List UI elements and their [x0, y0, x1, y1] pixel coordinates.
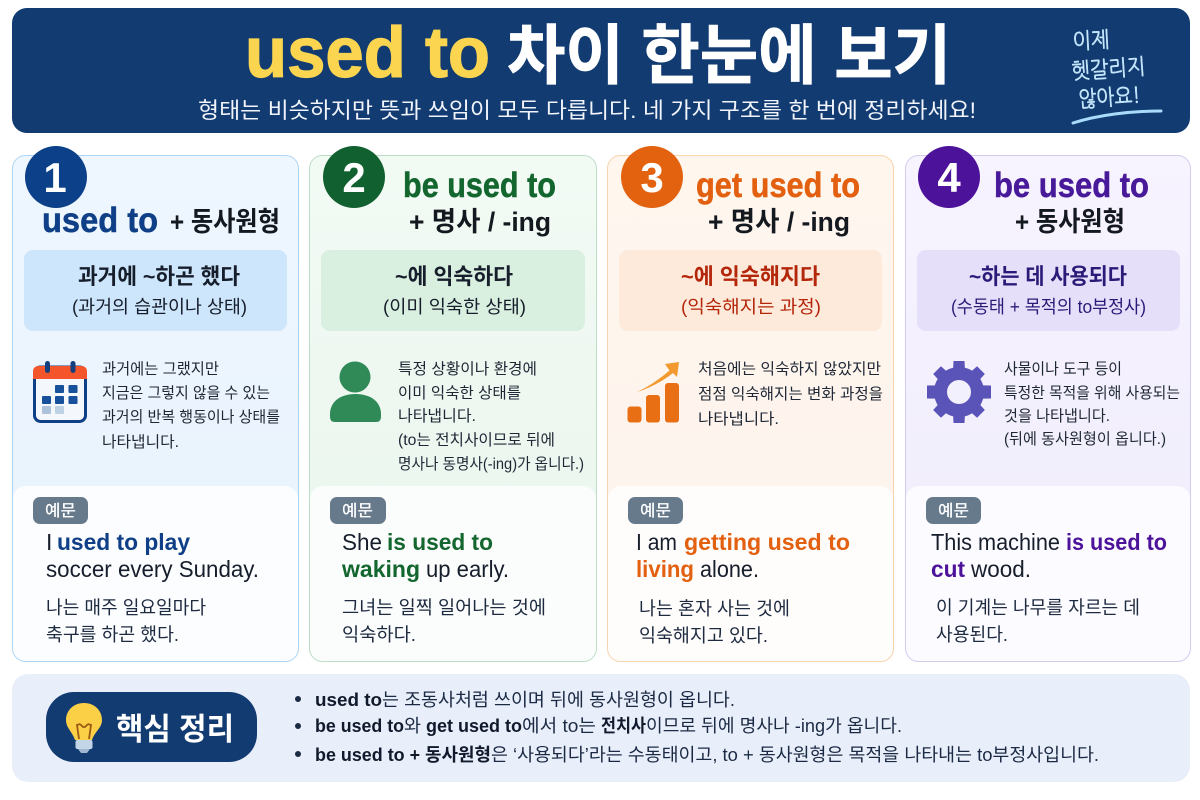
description: 이미 익숙한 상태를 [398, 384, 521, 402]
heading: + 명사 / -ing [708, 207, 850, 237]
number badge [621, 146, 683, 208]
example tag: 예문 [342, 502, 373, 520]
heading: get used to [696, 166, 860, 205]
description: 과거의 반복 행동이나 상태를 [102, 408, 280, 426]
example sentence: getting used to [684, 529, 850, 555]
example sentence: She [342, 529, 382, 555]
panel: used to + 동사원형 [12, 146, 298, 662]
description: 점점 익숙해지는 변화 과정을 [698, 385, 883, 403]
meaning box: 과거에 ~하곤 했다 [78, 264, 240, 289]
translation [639, 598, 790, 646]
description: 과거에는 그랬지만 [102, 360, 219, 378]
example sentence [46, 529, 259, 582]
translation: 익숙해지고 있다. [639, 625, 768, 646]
key summary pill [46, 692, 257, 762]
icon: rising bar chart [628, 362, 679, 422]
translation: 이 기계는 나무를 자르는 데 [936, 597, 1140, 618]
bullet 3: 은 ‘사용되다’라는 수동태이고, to + 동사원형은 목적을 나타내는 to부정사입니다. [491, 745, 1099, 765]
description [698, 360, 883, 428]
card background [310, 156, 596, 662]
translation [342, 597, 546, 645]
meaning box: (수동태 + 목적의 to부정사) [951, 297, 1146, 317]
meaning box [917, 250, 1180, 331]
pill label: 핵심 정리 [116, 712, 234, 747]
example area [608, 486, 893, 661]
bullet 1: used to [315, 690, 382, 710]
heading: + 동사원형 [1015, 207, 1125, 237]
number badge: 4 [937, 154, 961, 201]
heading [403, 166, 556, 237]
meaning box [619, 250, 882, 331]
translation: 나는 혼자 사는 것에 [639, 598, 790, 619]
icon: calendar [33, 361, 87, 422]
card background [12, 156, 298, 662]
header background [12, 8, 1190, 133]
meaning box [24, 250, 287, 331]
number badge [323, 146, 385, 208]
meaning box: (이미 익숙한 상태) [383, 297, 526, 317]
description: 것을 나타냅니다. [1004, 407, 1110, 425]
summary bullets [295, 690, 1099, 765]
description: (to는 전치사이므로 뒤에 [398, 431, 555, 449]
description [1004, 360, 1180, 448]
description: 사물이나 도구 등이 [1004, 360, 1122, 378]
example sentence [931, 529, 1167, 582]
description [102, 360, 280, 451]
card background [608, 156, 894, 662]
panel: be used to + 동사원형 [906, 146, 1190, 662]
example sentence: waking [341, 556, 420, 582]
title [245, 14, 951, 93]
example tag [330, 497, 386, 524]
example area [906, 486, 1190, 661]
panel: get used to + 명사 / -ing [608, 146, 894, 662]
heading: be used to [994, 166, 1149, 205]
description [398, 360, 584, 473]
bullet 2: be used to [315, 716, 404, 736]
meaning box: ~에 익숙하다 [395, 264, 513, 289]
header banner [12, 8, 1190, 133]
translation: 나는 매주 일요일마다 [46, 597, 206, 618]
number badge: 3 [640, 154, 664, 201]
translation: 익숙하다. [342, 624, 416, 645]
panel: key summary [12, 674, 1190, 782]
example sentence: is used to [387, 529, 493, 555]
translation [46, 597, 206, 645]
example sentence: living [636, 556, 694, 582]
example sentence: is used to [1066, 529, 1167, 555]
example tag [926, 497, 981, 524]
example tag: 예문 [938, 502, 969, 520]
subtitle: 형태는 비슷하지만 뜻과 쓰임이 모두 다릅니다. 네 가지 구조를 한 번에 정리하세요! [198, 98, 976, 123]
description: 나타냅니다. [698, 410, 779, 428]
heading [994, 166, 1149, 237]
example sentence: I am [636, 529, 677, 555]
summary background [12, 674, 1190, 782]
example area [310, 486, 596, 661]
bullet 2: 전치사 [601, 716, 646, 736]
description: (뒤에 동사원형이 옵니다.) [1004, 430, 1166, 448]
heading: be used to [403, 166, 556, 205]
heading: used to [42, 201, 158, 240]
description: 특정 상황이나 환경에 [398, 360, 537, 378]
title: 차이 한눈에 보기 [507, 19, 951, 92]
example sentence: up early. [426, 556, 509, 582]
translation: 그녀는 일찍 일어나는 것에 [342, 597, 546, 618]
example sentence: This machine [931, 529, 1060, 555]
handwritten note [1071, 28, 1161, 123]
description: 처음에는 익숙하지 않았지만 [698, 360, 881, 378]
bullet 1: 는 조동사처럼 쓰이며 뒤에 동사원형이 옵니다. [382, 690, 735, 710]
description: 나타냅니다. [398, 407, 476, 425]
description: 나타냅니다. [102, 433, 179, 451]
heading: + 명사 / -ing [409, 207, 551, 237]
bullet 2 [295, 716, 902, 736]
description: 특정한 목적을 위해 사용되는 [1004, 384, 1180, 402]
bullet 2: get used to [426, 716, 522, 736]
icon: light bulb [66, 703, 102, 753]
example sentence: soccer every Sunday. [46, 556, 259, 582]
translation: 사용된다. [936, 624, 1008, 645]
example sentence: I [46, 529, 52, 555]
example sentence: cut [931, 556, 965, 582]
example sentence: used to play [57, 529, 190, 555]
card background [906, 156, 1190, 662]
bullet 3: be used to + 동사원형 [315, 745, 491, 765]
heading [42, 201, 280, 240]
handwritten note: 헷갈리지 [1071, 55, 1146, 83]
number badge: 1 [43, 154, 67, 201]
panel: be used to + 명사 / -ing [310, 146, 596, 662]
bullet 2: 이므로 뒤에 명사나 -ing가 옵니다. [646, 716, 902, 736]
translation: 축구를 하곤 했다. [46, 624, 179, 645]
heading [696, 166, 860, 237]
handwritten note: 이제 [1072, 28, 1110, 53]
number badge [918, 146, 980, 208]
example sentence [636, 529, 850, 582]
example tag [33, 497, 88, 524]
number badge [25, 146, 87, 208]
meaning box: (과거의 습관이나 상태) [72, 297, 247, 317]
example tag: 예문 [640, 502, 671, 520]
icon: gear [927, 361, 991, 423]
bullet 2: 와 [404, 716, 421, 736]
example tag [628, 497, 683, 524]
example tag: 예문 [45, 502, 76, 520]
heading: + 동사원형 [170, 207, 280, 237]
example sentence [341, 529, 509, 582]
meaning box: (익숙해지는 과정) [681, 297, 821, 317]
example sentence: alone. [700, 556, 759, 582]
meaning box [321, 250, 585, 331]
meaning box: ~하는 데 사용되다 [969, 264, 1127, 289]
example area [13, 486, 298, 661]
example sentence: wood. [970, 556, 1031, 582]
number badge: 2 [342, 154, 366, 201]
meaning box: ~에 익숙해지다 [681, 264, 820, 289]
description: 지금은 그렇지 않을 수 있는 [102, 384, 270, 402]
title: used to [245, 14, 490, 93]
handwritten note: 않아요! [1078, 84, 1141, 111]
translation [936, 597, 1140, 645]
icon: person [330, 362, 381, 422]
bullet 2: 에서 to는 [522, 716, 596, 736]
description: 명사나 동명사(-ing)가 옵니다.) [398, 455, 584, 473]
